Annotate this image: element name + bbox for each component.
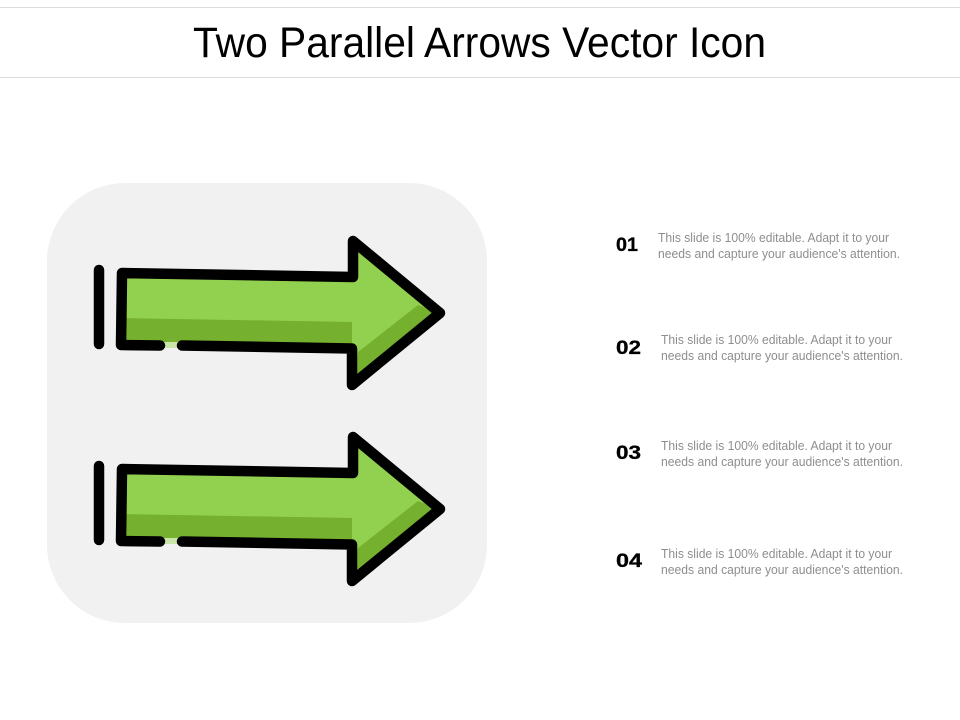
item 04: needs and capture your audience's attention. [661, 562, 903, 577]
item 03 [616, 438, 903, 469]
item 02 [616, 332, 903, 363]
item 02: 02 [616, 338, 641, 359]
item 04: This slide is 100% editable. Adapt it to your [661, 546, 893, 561]
panel: icon background [47, 183, 487, 623]
item 04: 04 [616, 551, 643, 572]
icon: upper arrow [99, 241, 440, 385]
icon: lower arrow [99, 437, 440, 581]
item 03: 03 [616, 443, 641, 464]
item 01: needs and capture your audience's attention. [658, 246, 900, 261]
item 02: needs and capture your audience's attention. [661, 348, 903, 363]
item 03: This slide is 100% editable. Adapt it to your [661, 438, 893, 453]
item 01: 01 [616, 235, 638, 256]
item 03: needs and capture your audience's attention. [661, 454, 903, 469]
title: Two Parallel Arrows Vector Icon [193, 19, 766, 67]
item 01 [616, 230, 900, 261]
item 02: This slide is 100% editable. Adapt it to your [661, 332, 893, 347]
item 04 [616, 546, 903, 577]
item 01: This slide is 100% editable. Adapt it to your [658, 230, 890, 245]
